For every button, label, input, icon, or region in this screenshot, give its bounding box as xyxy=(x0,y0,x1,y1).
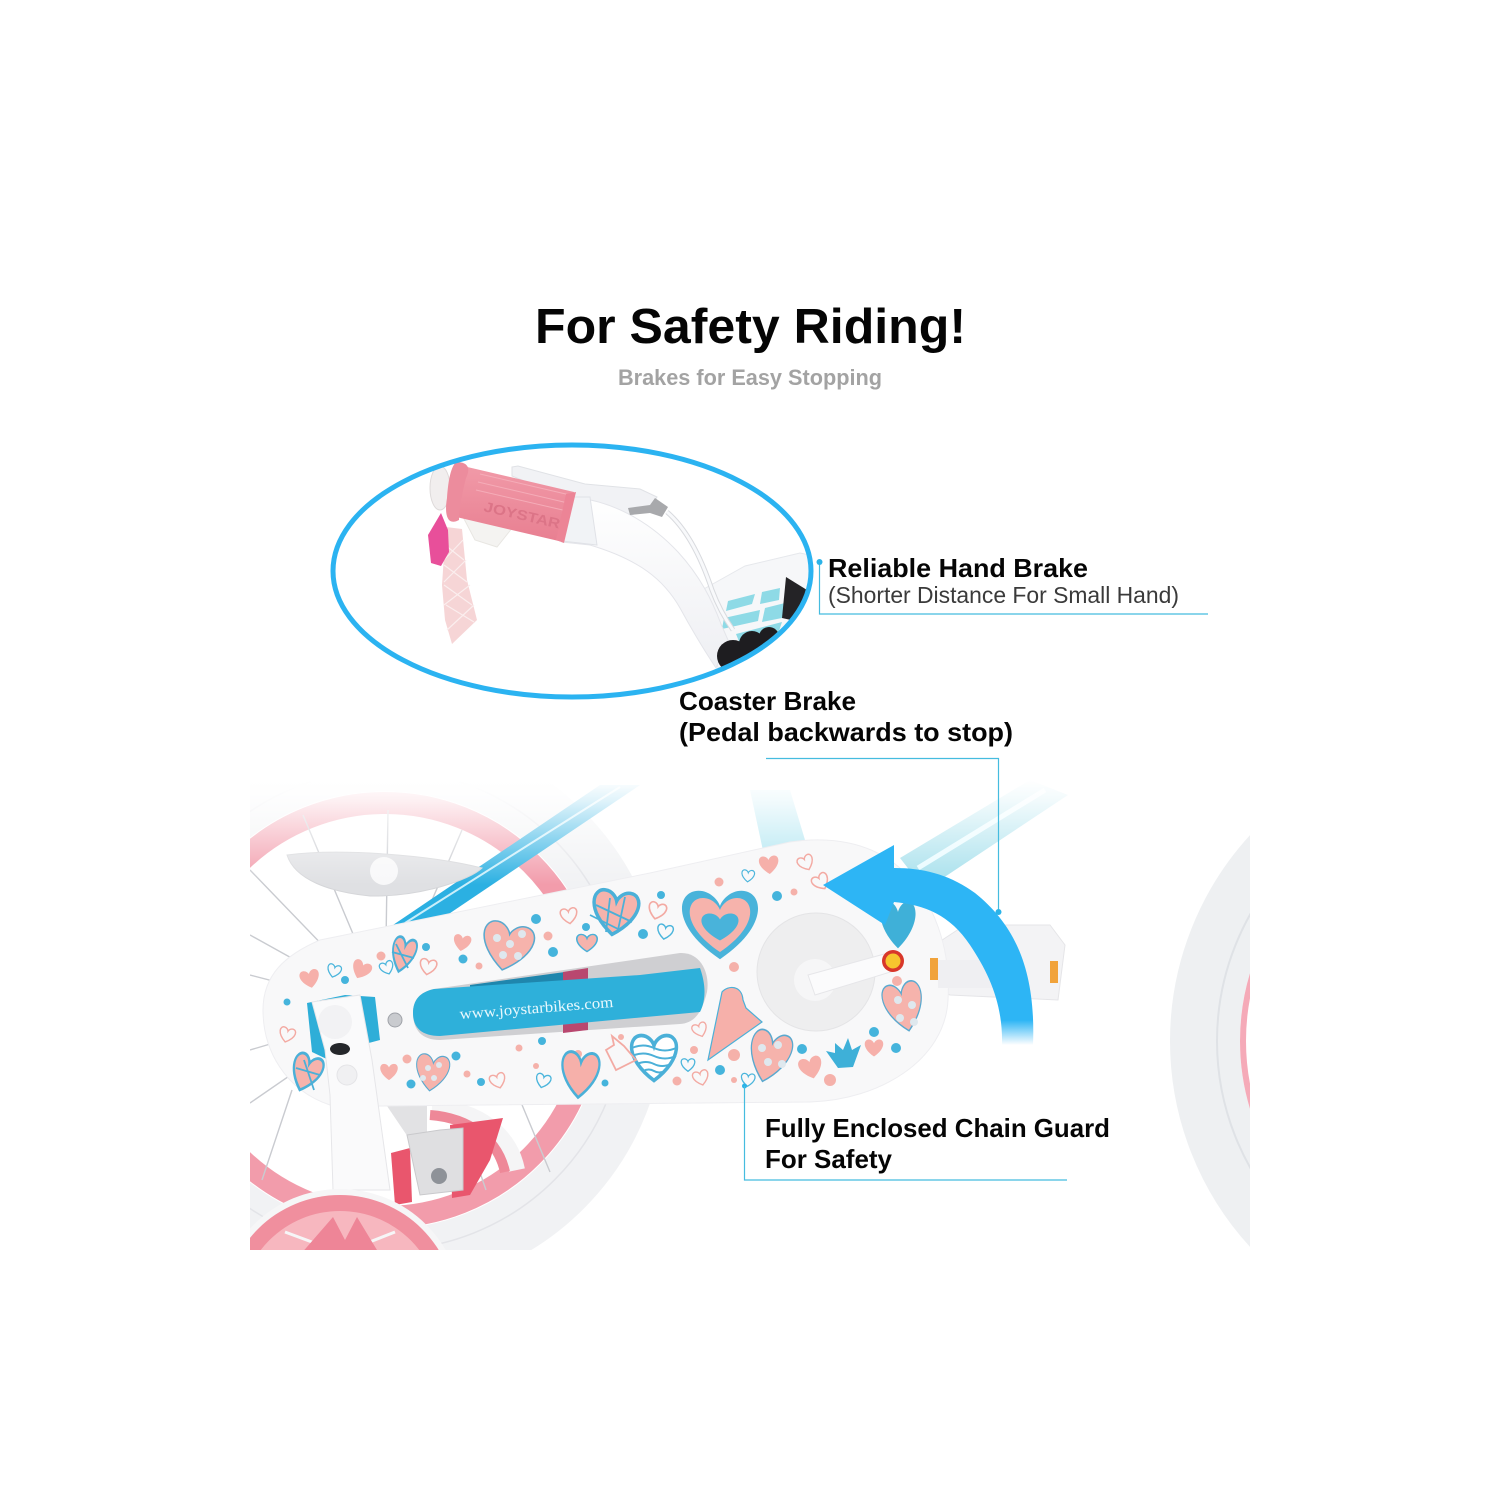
blue dots xyxy=(284,891,901,1088)
stabiliser white rim xyxy=(218,1189,462,1433)
callout: reliable hand brake xyxy=(816,553,1208,614)
pedal spindle xyxy=(938,960,998,988)
pink grip xyxy=(452,466,574,542)
guard bolt xyxy=(388,1013,402,1027)
stabiliser inner xyxy=(240,1211,440,1411)
reflector hub xyxy=(370,857,398,885)
infographic canvas xyxy=(250,308,1250,1250)
basket black clip xyxy=(782,577,807,622)
big heart pink band xyxy=(690,898,750,952)
arm rivet xyxy=(337,1065,357,1085)
dark pink ribbon loop xyxy=(428,513,449,566)
grip rear collar xyxy=(556,492,576,543)
seat tube xyxy=(751,793,805,848)
chain guard heading line two: For Safety xyxy=(765,1144,893,1174)
pedal reflector right xyxy=(1050,961,1058,983)
spoke reflector xyxy=(287,852,482,896)
guard slot xyxy=(413,953,708,1040)
panel: bike chain guard photo xyxy=(250,786,1250,1250)
blue heart decal near crank xyxy=(880,902,916,948)
clear lever guard xyxy=(463,517,513,547)
striped tall hearts xyxy=(560,987,762,1099)
front tyre tread line xyxy=(1217,783,1500,1299)
stabiliser white bars xyxy=(285,1232,395,1245)
stabiliser crown hub xyxy=(300,1217,380,1255)
coaster heading line two: (Pedal backwards to stop) xyxy=(679,717,1013,747)
brake lever xyxy=(512,466,657,516)
handlebar and basket photo xyxy=(428,462,815,672)
black wheels xyxy=(717,627,778,667)
crown xyxy=(826,1038,861,1068)
grip brand text band: JOYSTAR xyxy=(482,498,562,531)
leader dot xyxy=(742,1084,747,1088)
callout detail: (Shorter Distance For Small Hand) xyxy=(828,582,1179,608)
crank hub xyxy=(794,959,836,1001)
front tyre xyxy=(1205,771,1500,1311)
plaid hearts xyxy=(286,888,640,1095)
solid pink hearts xyxy=(299,855,883,1081)
rear rim xyxy=(250,792,582,1224)
leader line xyxy=(766,758,998,912)
white crank arm xyxy=(808,953,897,995)
end cap disc xyxy=(430,466,450,510)
blue tube in slot xyxy=(413,968,704,1036)
small pink crown outline xyxy=(606,1036,636,1070)
title: For Safety Riding! xyxy=(535,300,966,354)
plaid lines xyxy=(296,897,632,1090)
basket xyxy=(705,552,808,668)
stabiliser bracket xyxy=(407,1128,463,1195)
brake cable xyxy=(667,512,733,630)
spokes xyxy=(250,810,550,1190)
big heart xyxy=(682,891,758,959)
callout: coaster brake xyxy=(679,686,1013,915)
panel: hand brake close-up xyxy=(333,445,815,697)
polka dots xyxy=(420,930,918,1081)
big heart outer blue xyxy=(682,891,758,959)
stabiliser mount plate xyxy=(307,995,380,1075)
grip collar xyxy=(562,497,597,545)
grip flange xyxy=(446,462,468,522)
white chain guard xyxy=(263,840,948,1106)
tube highlight xyxy=(405,787,620,923)
coaster heading line one: Coaster Brake xyxy=(679,686,856,716)
slot dark blue upper strip xyxy=(470,972,565,995)
wave lines xyxy=(632,1046,676,1072)
mount slot xyxy=(330,1043,350,1055)
grip ribs xyxy=(476,474,570,511)
leader dot xyxy=(816,559,822,565)
pedal reflector left xyxy=(930,958,938,980)
bracket bolt xyxy=(431,1168,447,1184)
mount knob xyxy=(318,1005,352,1039)
stabiliser pink ring xyxy=(224,1195,456,1427)
rear tyre xyxy=(250,843,650,1250)
leader line xyxy=(820,562,1208,614)
second stabiliser pink arc xyxy=(430,1115,505,1172)
outline pink hearts xyxy=(278,853,832,1090)
wave heart xyxy=(632,1036,676,1080)
chain guard heading line one: Fully Enclosed Chain Guard xyxy=(765,1113,1110,1143)
polka hearts xyxy=(413,919,928,1093)
white handlebar tube xyxy=(562,497,728,668)
cable highlight xyxy=(667,512,733,630)
website text: www.joystarbikes.com xyxy=(459,994,614,1023)
callout heading: Reliable Hand Brake xyxy=(828,553,1088,583)
cable connector xyxy=(628,498,668,517)
ribbon lattice xyxy=(444,540,474,630)
down tube highlight xyxy=(916,798,1036,870)
stabiliser wheel xyxy=(218,1189,462,1433)
pale pink ribbon xyxy=(442,527,477,644)
rear blue frame tube xyxy=(393,785,640,930)
outline blue hearts xyxy=(326,870,755,1089)
callout: chain guard xyxy=(742,1084,1110,1180)
upper grey bracket xyxy=(388,1106,427,1134)
big heart blue centre xyxy=(701,914,739,940)
top fade overlay xyxy=(250,780,1068,881)
mount plate white xyxy=(312,995,390,1190)
front rim xyxy=(1243,809,1500,1273)
crank disc xyxy=(757,913,875,1031)
cap inner xyxy=(886,954,900,968)
rear tyre tread line xyxy=(250,842,606,1244)
leader line xyxy=(744,1086,1067,1180)
slot maroon strips xyxy=(563,968,588,1033)
leader dot xyxy=(996,909,1002,915)
cap outer xyxy=(882,950,904,972)
arrow: pedal backwards direction xyxy=(823,845,1033,1045)
crank cap xyxy=(882,950,904,972)
pedal xyxy=(927,925,1065,1000)
down tube xyxy=(900,793,1068,876)
subtitle: Brakes for Easy Stopping xyxy=(618,365,882,390)
chain guard decals xyxy=(278,853,928,1099)
red stabiliser hub pieces xyxy=(391,1118,503,1205)
pink dots xyxy=(376,878,902,1086)
blue ellipse outline xyxy=(333,445,811,697)
second stabiliser ring xyxy=(432,1107,517,1170)
basket slats xyxy=(722,588,785,644)
